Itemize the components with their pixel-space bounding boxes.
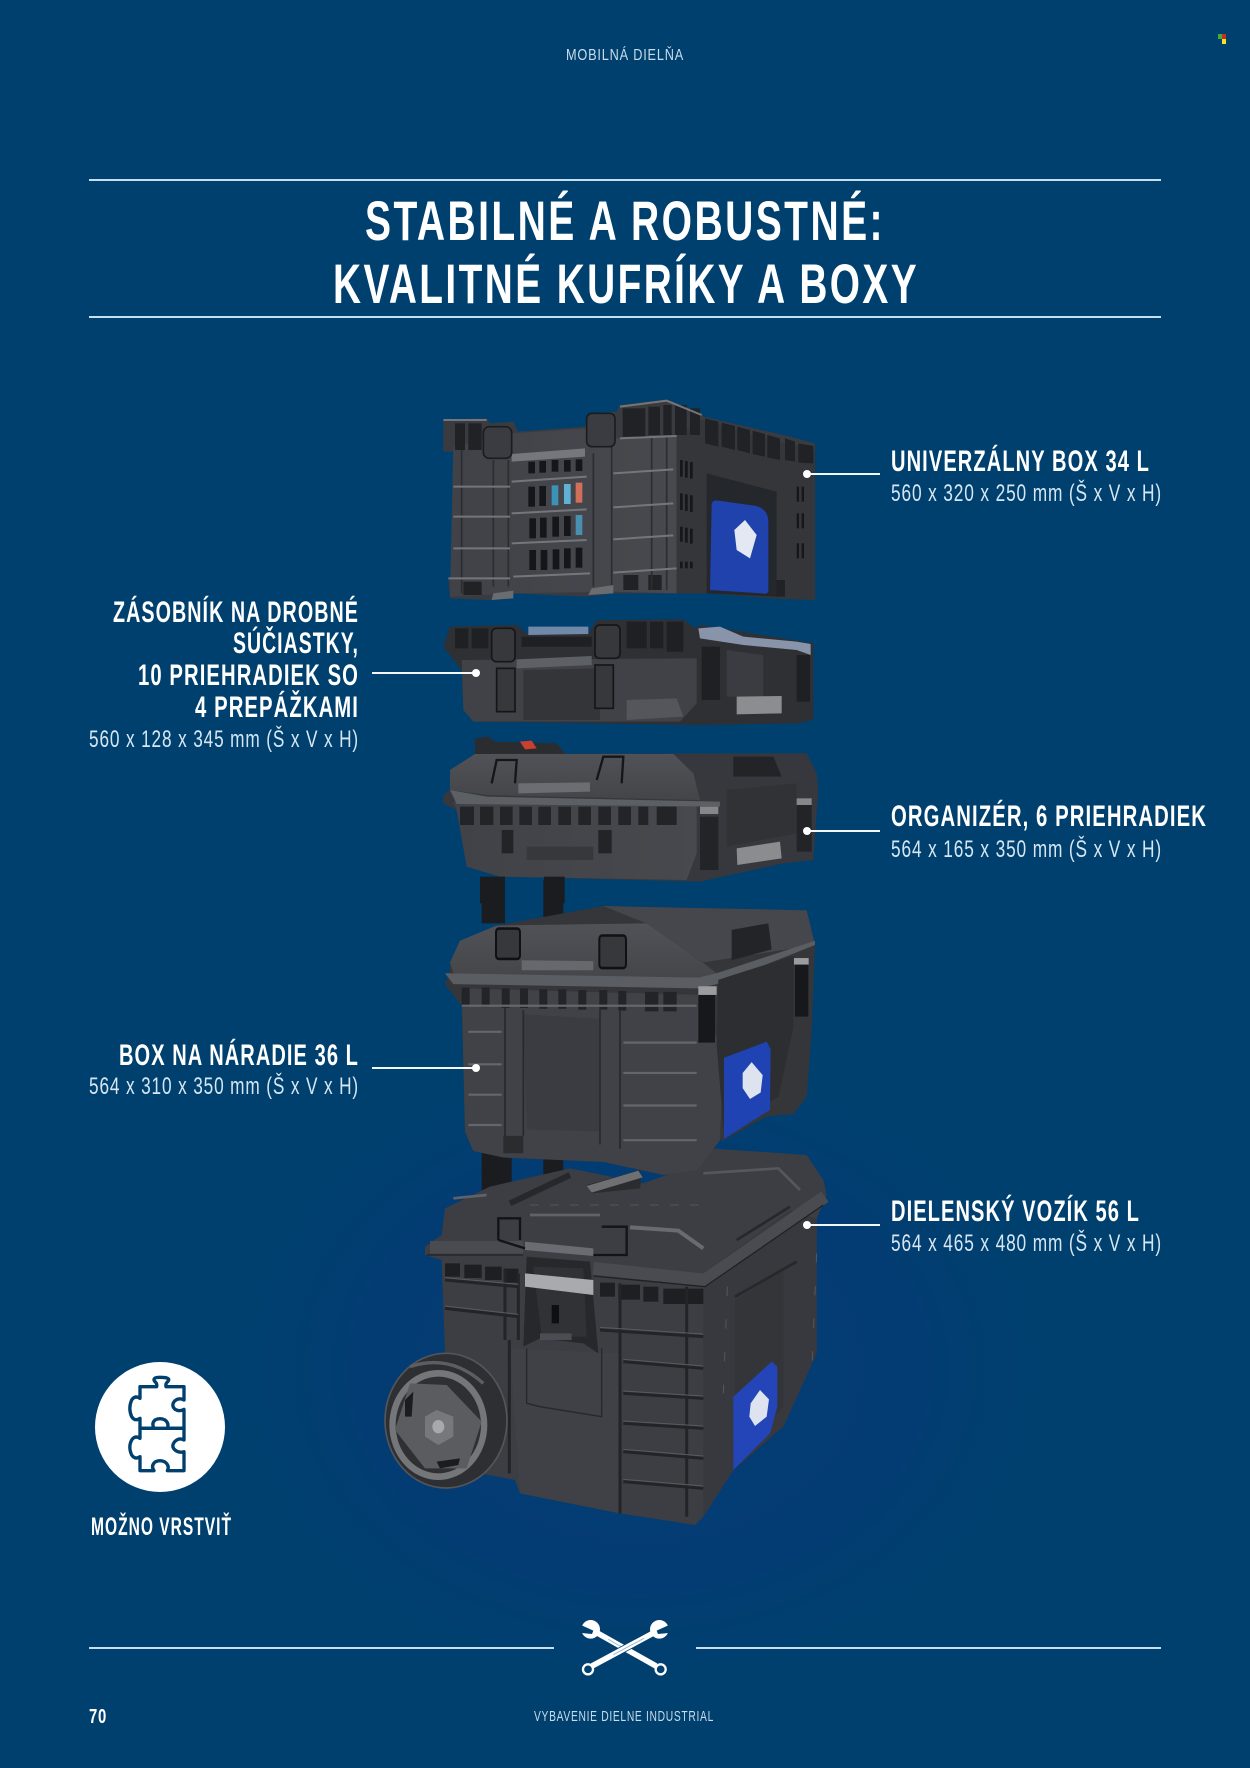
- icon: crossed wrenches: [577, 1620, 673, 1674]
- callout: small parts organiser: SÚČIASTKY,: [233, 626, 359, 660]
- page number: 70: [89, 1706, 107, 1728]
- callout: small parts organiser: 560 x 128 x 345 mm (Š x V x H): [89, 725, 359, 753]
- callout: small parts organiser: 4 PREPÁŽKAMI: [195, 690, 359, 724]
- colour marker: [1218, 34, 1226, 44]
- callout: small parts organiser: 10 PRIEHRADIEK SO: [138, 659, 359, 692]
- product: workshop trolley 56 L: [384, 1148, 827, 1525]
- footer rule right: [696, 1647, 1161, 1649]
- callout: universal box: [803, 444, 1162, 507]
- rim: [430, 1197, 825, 1280]
- telescopic handle bars lower: [482, 880, 563, 1190]
- title block: [89, 179, 1161, 318]
- telescopic handle bars upper: [480, 877, 565, 903]
- ventilation windows: [528, 459, 582, 570]
- icon: stackable puzzle badge: [95, 1362, 225, 1492]
- blue plate with logo: [733, 1362, 777, 1470]
- callout: tool box: [89, 1038, 480, 1100]
- callout: trolley: [803, 1194, 1162, 1257]
- product: organiser 6 compartments: [443, 737, 818, 882]
- footer label: VYBAVENIE DIELNE INDUSTRIAL: [534, 1708, 714, 1725]
- footer rule left: [89, 1647, 554, 1649]
- callout: tool box: 564 x 310 x 350 mm (Š x V x H): [89, 1072, 359, 1100]
- product: universal box 34 L (crate): [443, 399, 815, 600]
- callout: small parts organiser: ZÁSOBNÍK NA DROBNÉ: [113, 595, 359, 629]
- title block: STABILNÉ A ROBUSTNÉ:: [365, 189, 885, 252]
- blue plate with logo: [710, 500, 768, 594]
- callout: small parts organiser: [89, 595, 480, 753]
- callout: tool box: BOX NA NÁRADIE 36 L: [119, 1038, 359, 1072]
- icon label: MOŽNO VRSTVIŤ: [91, 1511, 232, 1541]
- title block: KVALITNÉ KUFRÍKY A BOXY: [333, 252, 919, 315]
- product: tool box 36 L: [445, 906, 815, 1175]
- grill cells: [445, 1263, 703, 1304]
- blue plate with logo: [724, 1042, 771, 1139]
- latch: [523, 1257, 598, 1353]
- product: small parts organiser: [443, 619, 813, 725]
- section label: MOBILNÁ DIELŇA: [566, 45, 684, 64]
- wheel: [384, 1353, 508, 1489]
- background glow behind cart: [200, 1030, 1080, 1710]
- callout: organiser: [803, 799, 1207, 863]
